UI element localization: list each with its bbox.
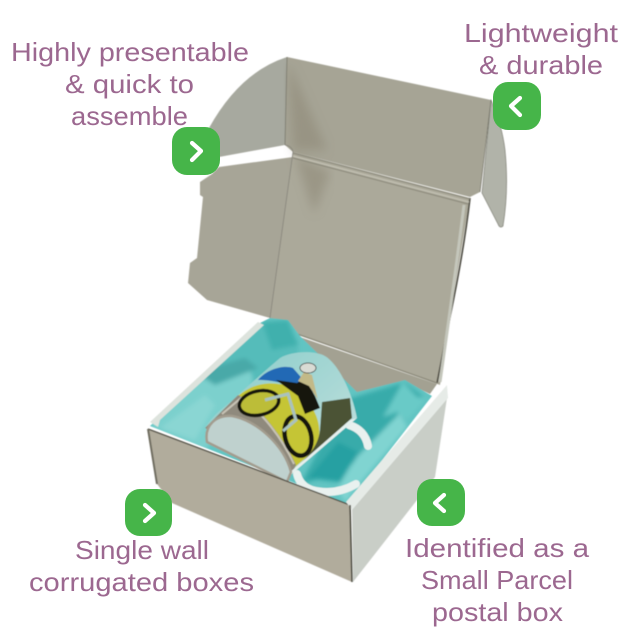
icon: left chevron button (493, 82, 541, 130)
callout: presentable (11, 37, 249, 175)
text: corrugated boxes: corrugated boxes (29, 567, 254, 597)
inner back wall (297, 336, 437, 394)
back lid flap (285, 57, 491, 197)
lower left flap (188, 157, 293, 318)
front wall (148, 429, 352, 582)
mug body artwork (205, 352, 358, 474)
icon: right chevron button (125, 489, 172, 536)
callout: postal box (405, 479, 590, 627)
open box with mug (145, 57, 507, 582)
right wall (352, 398, 447, 582)
text: quick to: & quick to (65, 69, 194, 99)
right lid ear (482, 100, 507, 227)
lid shadows (288, 62, 330, 214)
left lid ear (209, 57, 287, 157)
left rim (150, 322, 264, 427)
text: Single wall: Single wall (75, 535, 209, 565)
mug lower white edge (291, 418, 357, 474)
mug (200, 345, 368, 492)
lid right edge (437, 198, 470, 383)
mug handle (297, 425, 368, 492)
icon: left chevron button (417, 479, 465, 526)
tissue paper (145, 315, 435, 510)
text: assemble: assemble (71, 101, 188, 131)
text: Lightweight: Lightweight (464, 18, 619, 48)
right rim (346, 385, 448, 510)
fold crease (293, 153, 470, 204)
icon: right chevron button (172, 127, 220, 175)
mug rim face (207, 416, 291, 482)
main lid panel (270, 152, 470, 385)
text: Identified as a: Identified as a (405, 533, 590, 563)
corner edge (350, 505, 352, 582)
text: Small Parcel: Small Parcel (421, 565, 573, 595)
callout: lightweight (464, 18, 619, 130)
text: Highly presentable: Highly presentable (11, 37, 249, 67)
callout: single wall (29, 489, 254, 597)
text: postal box: postal box (432, 597, 563, 627)
text: durable: & durable (479, 50, 603, 80)
